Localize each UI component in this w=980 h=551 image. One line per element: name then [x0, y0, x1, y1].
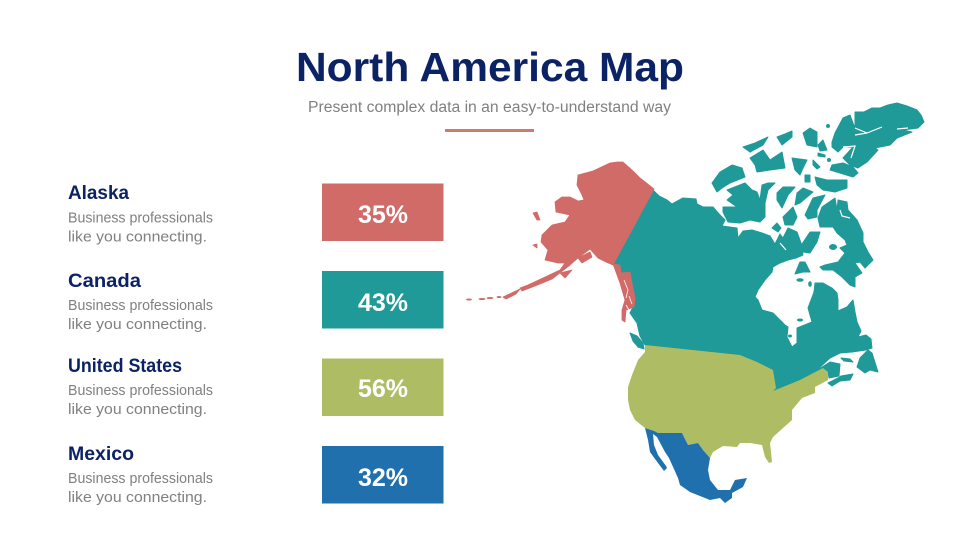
map region: Mexico: [645, 428, 747, 503]
panhandle channels: [624, 280, 632, 310]
title underline: [445, 129, 534, 132]
Alaska heading: Alaska: [68, 183, 129, 204]
Alaska value box: [322, 184, 444, 241]
Kenai, Kodiak and Bering Sea islands: [578, 252, 592, 263]
map region: United States: [628, 345, 828, 463]
Mexico description: Business professionals: [68, 471, 213, 487]
Alaska description: like you connecting.: [68, 230, 207, 246]
panel: Canada row: [68, 271, 444, 333]
Aleutian Islands: [503, 289, 520, 299]
panel: United States row: [68, 356, 444, 418]
Mexico value box: [322, 446, 444, 504]
United States value: 56%: [358, 375, 408, 403]
Melville Peninsula side island: [805, 195, 825, 219]
Canada heading: Canada: [68, 271, 141, 292]
map region: Alaska: [466, 162, 654, 322]
Canada value box: [322, 271, 444, 328]
United States description: Business professionals: [68, 383, 213, 399]
Alaska description: Business professionals: [68, 210, 213, 226]
Arctic islands: [777, 187, 795, 208]
Mexico description: like you connecting.: [68, 490, 207, 506]
Canada description: Business professionals: [68, 298, 213, 314]
map region: Canada: [613, 103, 924, 391]
Vancouver Island: [630, 333, 644, 349]
Banks Island: [712, 165, 745, 192]
Devon and Bylot area: [830, 163, 858, 177]
Mexico heading: Mexico: [68, 444, 134, 465]
subtitle: Present complex data in an easy-to-understand way: [308, 99, 671, 116]
United States heading: United States: [68, 356, 182, 377]
Canada description: like you connecting.: [68, 317, 207, 333]
title: North America Map: [296, 44, 684, 90]
Alaska panhandle: [613, 264, 635, 322]
United States description: like you connecting.: [68, 402, 207, 418]
chart: North America map: [466, 103, 924, 503]
United States value box: [322, 358, 444, 416]
panel: Mexico row: [68, 444, 444, 506]
Canada value: 43%: [358, 289, 408, 317]
Southampton Island and Hudson Bay islands: [795, 262, 810, 274]
Atlantic provinces and Newfoundland: [828, 374, 853, 386]
Baffin Island: [818, 198, 873, 287]
fjord channels: [780, 127, 908, 250]
Mexico value: 32%: [358, 464, 408, 492]
Victoria Island: [723, 183, 775, 223]
Gaspe peninsula: [819, 362, 840, 378]
panel: Alaska row: [68, 183, 444, 246]
Alaska value: 35%: [358, 201, 408, 229]
Ellesmere Island: [832, 103, 924, 168]
